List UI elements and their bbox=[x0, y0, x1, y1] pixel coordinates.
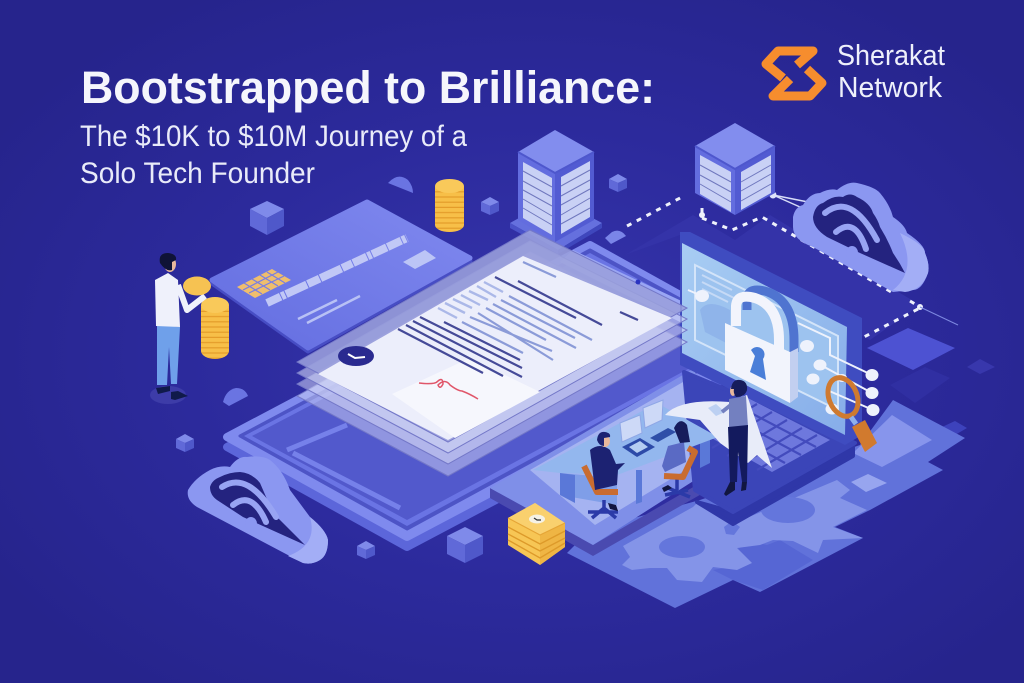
cube bbox=[609, 174, 627, 192]
server rack: right bbox=[695, 123, 775, 215]
laptop screen bbox=[680, 232, 880, 445]
circuit nodes bbox=[688, 290, 880, 416]
connector nodes and thin links bbox=[699, 192, 958, 325]
office desk scene bbox=[533, 400, 718, 518]
main heading: Bootstrapped to Brilliance: bbox=[81, 62, 655, 113]
device side bbox=[227, 255, 770, 547]
dark platform behind servers bbox=[625, 215, 920, 340]
arm bbox=[178, 285, 205, 310]
flat coin bbox=[183, 276, 211, 296]
card small panel bbox=[403, 250, 436, 269]
subtitle line 1: The $10K to $10M Journey of a bbox=[80, 120, 467, 153]
dome bbox=[388, 177, 413, 193]
floor base bbox=[567, 400, 965, 608]
shoes bbox=[156, 386, 188, 400]
highlight tile bbox=[853, 415, 932, 467]
device inner rim bbox=[244, 253, 750, 526]
head bbox=[160, 253, 176, 272]
gear: dark bbox=[713, 540, 813, 590]
screen outline panel bbox=[695, 265, 838, 410]
floor diamonds, right side bbox=[858, 297, 995, 435]
logo wordmark: Network bbox=[838, 72, 942, 104]
top sheet band bbox=[297, 230, 687, 442]
man at desk bbox=[584, 432, 625, 518]
screen display bbox=[682, 243, 847, 435]
device top corner highlight bbox=[560, 250, 690, 322]
sheet layer 3 bbox=[297, 252, 687, 464]
legs bbox=[728, 425, 748, 482]
document lines: light bbox=[438, 282, 503, 318]
device screen bbox=[252, 259, 742, 520]
arm bbox=[722, 404, 732, 412]
coin stack: top bbox=[435, 179, 464, 232]
icon: wifi arcs bbox=[222, 482, 276, 522]
cube bbox=[176, 434, 194, 452]
coin stack: person bbox=[201, 297, 229, 359]
top sheet paper bbox=[318, 256, 672, 440]
body bbox=[590, 446, 625, 490]
office platform bbox=[490, 369, 742, 556]
card number stripe bbox=[267, 238, 407, 303]
chair base bbox=[665, 478, 690, 497]
person with coins bbox=[150, 253, 229, 404]
credit card bbox=[212, 202, 470, 351]
laptop base bbox=[684, 372, 855, 524]
card chip bbox=[237, 269, 291, 298]
ground shadow bbox=[150, 386, 186, 404]
sheet layer 2 bbox=[297, 241, 687, 453]
small dark tile bbox=[724, 521, 740, 535]
woman seated at desk bbox=[662, 421, 695, 497]
chair base bbox=[588, 500, 618, 518]
platform side bbox=[490, 460, 740, 556]
screen frame bbox=[680, 232, 862, 445]
logo wordmark: Sherakat bbox=[837, 40, 945, 72]
head bbox=[730, 380, 747, 397]
head bbox=[600, 435, 610, 447]
document lines: dark bbox=[398, 277, 638, 377]
device bezel bbox=[240, 250, 755, 529]
dashed network connections bbox=[627, 197, 920, 338]
check badge bbox=[529, 514, 545, 524]
shoe bbox=[662, 485, 672, 492]
cube bbox=[481, 197, 499, 215]
server drawers bbox=[523, 162, 552, 235]
gear hole: left bbox=[659, 536, 705, 558]
cloud: top right bbox=[793, 183, 929, 292]
paper signature panel bbox=[392, 358, 540, 438]
gold document stack bbox=[508, 503, 565, 565]
stacked document sheets bbox=[297, 230, 687, 476]
hair bbox=[674, 421, 690, 443]
chair bbox=[584, 466, 618, 492]
shoe bbox=[608, 503, 618, 511]
device indicator dot bbox=[636, 280, 640, 284]
monitor bbox=[643, 400, 663, 428]
desk panels bbox=[560, 473, 617, 505]
keyboard bbox=[696, 395, 830, 472]
lock icon bbox=[725, 290, 798, 403]
trousers bbox=[157, 325, 180, 385]
heels bbox=[724, 482, 747, 496]
logo wordmark bbox=[837, 40, 945, 104]
sheet layer 4 bbox=[297, 264, 687, 476]
body bbox=[662, 442, 686, 472]
torso bbox=[729, 396, 748, 428]
decorative cubes and domes bbox=[176, 174, 627, 563]
isometric floor with gears bbox=[567, 400, 965, 608]
screen divider bbox=[287, 425, 400, 508]
signature bbox=[419, 380, 478, 399]
device rim bbox=[227, 245, 770, 537]
shirt bbox=[155, 273, 180, 327]
server rack: left bbox=[510, 130, 602, 254]
keyboard on desk bbox=[650, 428, 676, 442]
platform top bbox=[490, 369, 742, 545]
standing woman with cape bbox=[665, 380, 772, 496]
document lines: mid bbox=[462, 262, 592, 360]
dome bbox=[223, 388, 248, 406]
check badge bbox=[338, 346, 374, 366]
screen text lines bbox=[702, 275, 740, 302]
server drawers bbox=[700, 155, 731, 212]
small tile bbox=[851, 474, 887, 492]
card lines bbox=[298, 296, 360, 323]
icon: wifi arcs bbox=[825, 207, 877, 249]
logo: Sherakat Network bbox=[766, 40, 945, 104]
cube bbox=[447, 527, 483, 563]
subtitle line 2: Solo Tech Founder bbox=[80, 157, 315, 190]
magnifying glass bbox=[823, 373, 877, 452]
gears: light shape bbox=[622, 480, 867, 582]
cloud: bottom left bbox=[188, 456, 328, 564]
tablet device bbox=[227, 245, 770, 547]
cape bbox=[665, 395, 772, 468]
icon: logo mark bbox=[766, 51, 822, 96]
cube bbox=[357, 541, 375, 559]
chair bbox=[664, 448, 695, 477]
keyhole bbox=[750, 347, 766, 380]
monitor bbox=[620, 415, 642, 442]
dome bbox=[605, 231, 626, 244]
tablet on desk bbox=[622, 438, 655, 457]
title block bbox=[80, 62, 655, 190]
desk top bbox=[533, 403, 718, 475]
gear hole: right bbox=[761, 497, 815, 523]
held tablet bbox=[708, 404, 725, 416]
inner floor bbox=[530, 378, 735, 525]
cube bbox=[250, 201, 284, 235]
